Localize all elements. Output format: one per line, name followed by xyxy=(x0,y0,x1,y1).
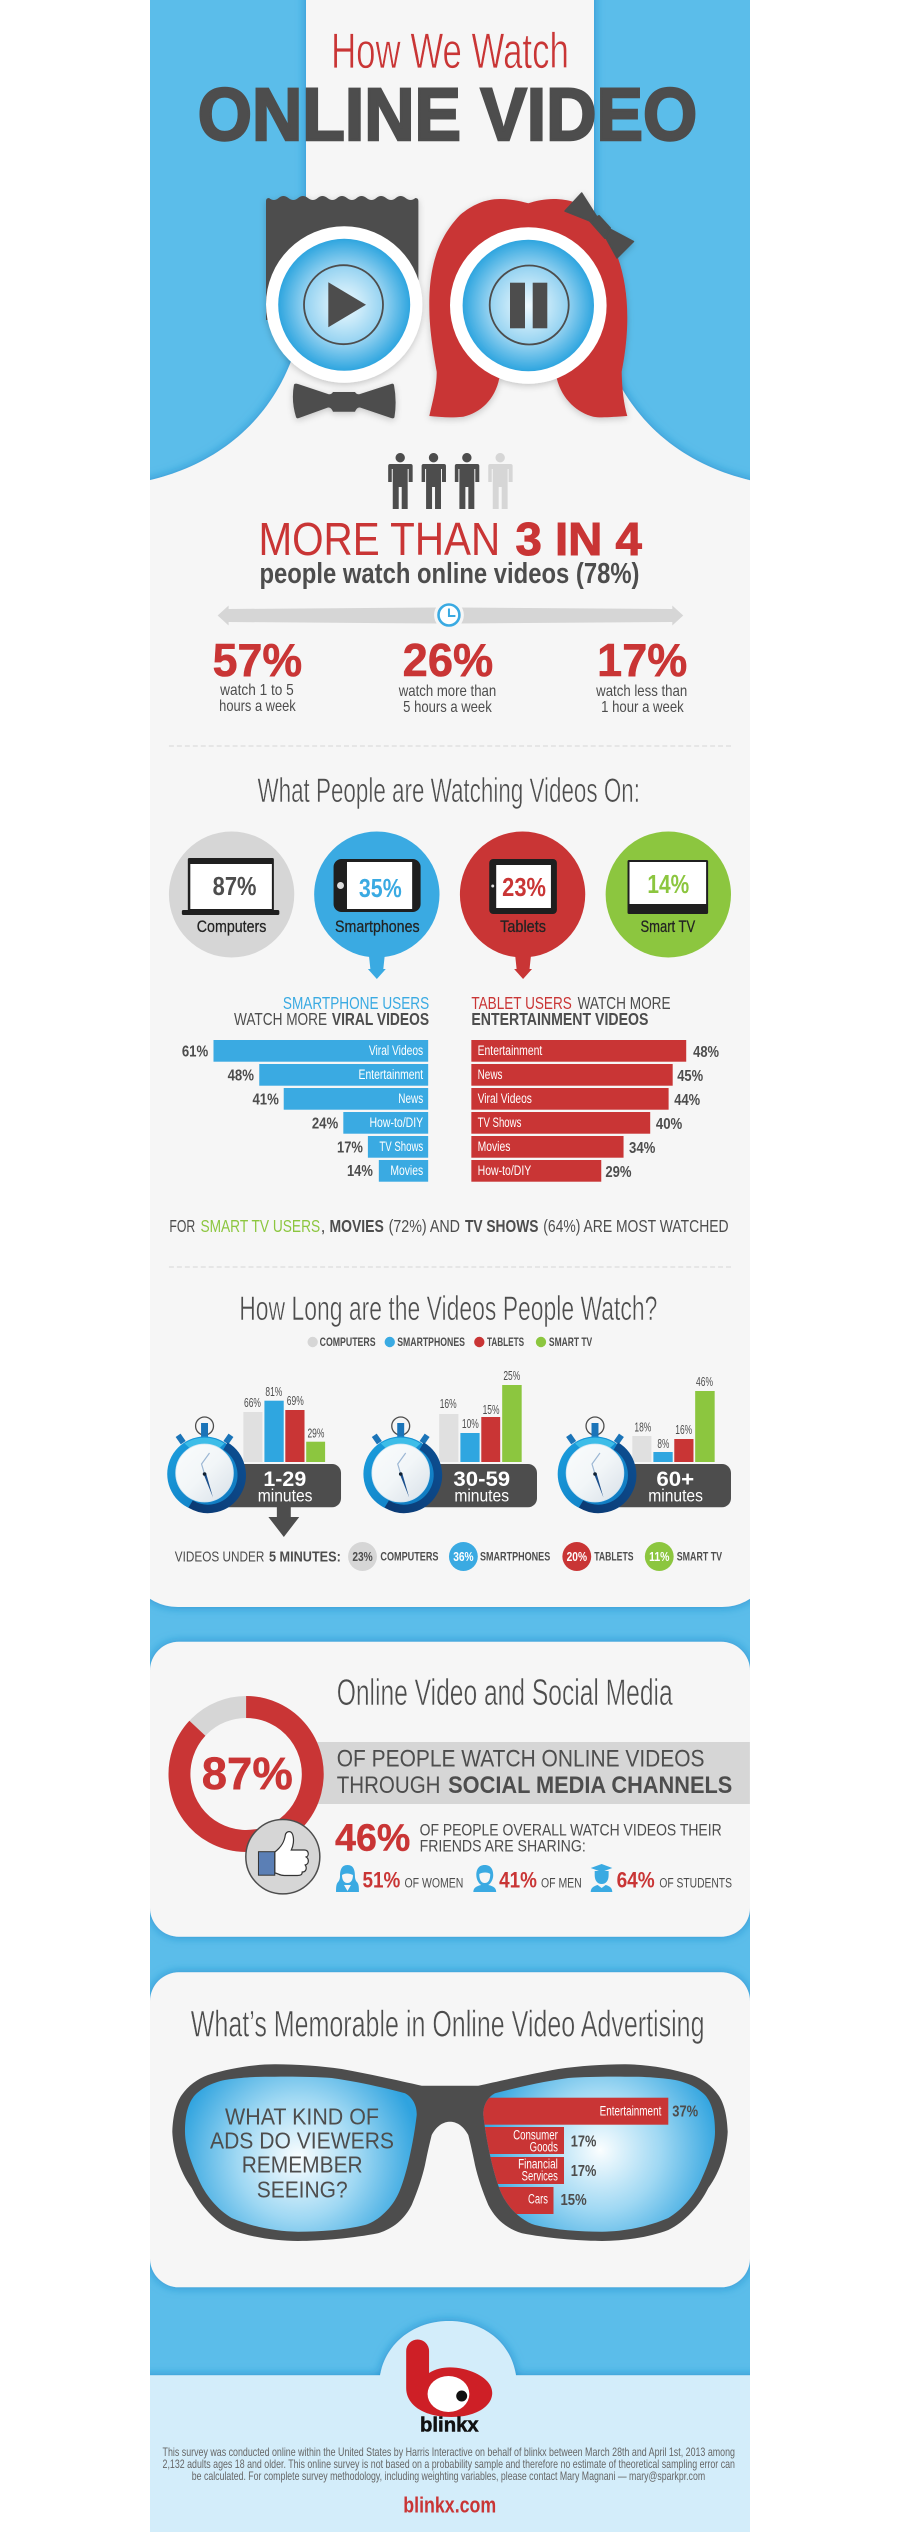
main content layer xyxy=(163,23,750,2517)
duration chart: 60+ minutes xyxy=(558,1374,731,1512)
stat: 17 percent: watch less than xyxy=(595,683,687,700)
headline: more than 3 in 4 xyxy=(258,513,642,590)
icon: thumbs up xyxy=(246,1820,320,1894)
bar chart: smartphone users: News xyxy=(398,1090,423,1106)
heading: tablet users: WATCH MORE xyxy=(578,993,671,1013)
duration chart: 60+ minutes: 18% xyxy=(634,1420,652,1435)
donut chart: 87 percent xyxy=(179,1707,313,1841)
right lens with bar chart: Goods xyxy=(530,2138,558,2154)
stat: 57 percent xyxy=(213,634,302,715)
legend: devices: TABLETS xyxy=(487,1335,524,1349)
stat: 17 percent xyxy=(595,634,687,716)
legend: devices xyxy=(307,1335,592,1349)
bar chart: tablet users: Movies xyxy=(478,1138,510,1154)
bar chart: tablet users: 45% xyxy=(677,1068,703,1085)
bar chart: smartphone users: Entertainment xyxy=(359,1066,423,1082)
heading: what people are watching: What People are Watching Videos On: xyxy=(257,772,640,810)
bar chart: tablet users: Viral Videos xyxy=(478,1090,532,1106)
stat: 57 percent: 57% xyxy=(213,634,302,686)
stat: women: OF WOMEN xyxy=(404,1875,463,1891)
heading: online video and social media: Online Video and Social Media xyxy=(337,1672,673,1713)
bar chart: smartphone users: Viral Videos xyxy=(369,1042,423,1058)
logo: blinkx xyxy=(406,2340,492,2437)
character: play button with bow tie xyxy=(266,196,422,418)
device: smart tv: 14% xyxy=(647,871,689,899)
band: social media channels: OF PEOPLE WATCH ONLINE VIDEOS xyxy=(337,1746,705,1773)
bar chart: smartphone users: 14% xyxy=(347,1163,373,1180)
stat: men: OF MEN xyxy=(541,1875,582,1891)
device: tablets: 23% xyxy=(502,874,546,902)
band: social media channels: THROUGH xyxy=(337,1772,441,1799)
title: ONLINE VIDEO xyxy=(198,73,697,156)
bar chart: tablet users: News xyxy=(478,1066,502,1082)
stat: students: 64% xyxy=(617,1868,655,1893)
bar chart: smartphone users: 61% xyxy=(182,1044,208,1061)
band: social media channels: SOCIAL MEDIA CHANNELS xyxy=(448,1772,732,1799)
bar chart: tablet users xyxy=(471,1040,719,1182)
callout: smart tv users: TV SHOWS xyxy=(465,1216,538,1236)
band: social media channels xyxy=(317,1742,750,1804)
legend: devices: SMART TV xyxy=(549,1335,592,1349)
stat: men xyxy=(473,1865,582,1893)
stat: men: 41% xyxy=(499,1868,537,1893)
row: videos under 5 minutes: SMARTPHONES xyxy=(480,1550,550,1564)
duration chart: 1-29 minutes: 1-29 xyxy=(263,1468,306,1491)
bar chart: smartphone users xyxy=(182,1040,428,1182)
arrow: time scale with clock xyxy=(218,600,683,630)
blue paper background xyxy=(150,0,750,2532)
icon: four people xyxy=(388,453,513,509)
duration chart: 30-59 minutes: 15% xyxy=(483,1402,500,1417)
right lens with bar chart: Financial xyxy=(518,2156,558,2172)
row: videos under 5 minutes xyxy=(175,1542,722,1571)
arrow: down to short videos xyxy=(268,1507,299,1537)
device: smartphones: Smartphones xyxy=(335,917,420,936)
stat: 46 percent friends: 46% xyxy=(335,1818,410,1860)
logo: blinkx: blinkx xyxy=(420,2415,479,2437)
heading: tablet users: TABLET USERS xyxy=(471,993,572,1013)
bar chart: tablet users: 44% xyxy=(674,1092,700,1109)
bar chart: tablet users: How-to/DIY xyxy=(478,1162,531,1178)
callout: smart tv users: (64%) ARE MOST WATCHED xyxy=(543,1216,729,1236)
stat: 26 percent: watch more than xyxy=(398,683,496,700)
icon: stopwatch one xyxy=(167,1417,242,1512)
duration chart: 1-29 minutes xyxy=(167,1384,341,1512)
stat: women: 51% xyxy=(363,1868,400,1893)
left lens with question: WHAT KIND OF xyxy=(225,2103,379,2129)
stat: women xyxy=(336,1865,463,1893)
duration chart: 30-59 minutes: minutes xyxy=(454,1486,509,1506)
heading: tablet users xyxy=(471,993,671,1029)
icon: stopwatch three xyxy=(558,1417,632,1512)
footer link: blinkx.com: blinkx.com xyxy=(403,2492,496,2517)
heading: how long are the videos: How Long are the Videos People Watch? xyxy=(239,1290,657,1328)
duration chart: 60+ minutes: minutes xyxy=(648,1486,703,1506)
device: smart tv xyxy=(606,832,731,958)
stat: 46 percent friends: FRIENDS ARE SHARING: xyxy=(420,1837,586,1856)
bar chart: smartphone users: 17% xyxy=(337,1140,363,1157)
right lens with bar chart: 17% xyxy=(571,2163,596,2180)
row: videos under 5 minutes: 23% xyxy=(352,1549,373,1564)
bar chart: tablet users: 40% xyxy=(656,1116,682,1133)
legend: devices: COMPUTERS xyxy=(320,1335,376,1349)
heading: tablet users: ENTERTAINMENT VIDEOS xyxy=(471,1009,648,1029)
headline: more than 3 in 4: 3 IN 4 xyxy=(516,513,642,565)
stat: 57 percent: hours a week xyxy=(219,698,296,715)
row: videos under 5 minutes: 20% xyxy=(567,1549,587,1564)
device: tablets: Tablets xyxy=(500,917,546,936)
right lens with bar chart: Cars xyxy=(528,2190,548,2206)
callout: smart tv users: SMART TV USERS xyxy=(200,1216,320,1236)
stat: 46 percent friends: OF PEOPLE OVERALL WATCH VIDEOS THEIR xyxy=(420,1820,722,1839)
right lens with bar chart: 37% xyxy=(672,2104,698,2121)
duration chart: 1-29 minutes: 66% xyxy=(244,1395,261,1410)
callout: smart tv users: FOR xyxy=(169,1216,195,1236)
right lens with bar chart: Consumer xyxy=(513,2126,558,2142)
duration chart: 60+ minutes: 8% xyxy=(657,1436,670,1451)
footnote: survey methodology: be calculated. For complete survey methodology, including weighting variables, please contact Mary Magnani — mary@sparkpr.com xyxy=(192,2471,705,2483)
right lens with bar chart: 15% xyxy=(560,2192,587,2209)
infographic canvas xyxy=(150,0,750,2532)
left lens with question: REMEMBER xyxy=(242,2152,363,2178)
duration chart: 1-29 minutes: 69% xyxy=(287,1393,304,1408)
device: computers: Computers xyxy=(197,917,266,936)
row: videos under 5 minutes: 36% xyxy=(453,1549,474,1564)
right lens with bar chart xyxy=(470,2077,715,2232)
footnote: survey methodology: This survey was conducted online within the United States by Harris Interactive on behalf of blinkx between March 28th and April 1st, 2013 among xyxy=(163,2447,735,2459)
row: videos under 5 minutes: COMPUTERS xyxy=(380,1550,439,1564)
stat: 57 percent: watch 1 to 5 xyxy=(219,682,294,699)
row: videos under 5 minutes: TABLETS xyxy=(594,1550,634,1564)
device: smartphones: 35% xyxy=(359,875,402,903)
duration chart: 30-59 minutes: 30-59 xyxy=(453,1468,510,1491)
headline: more than 3 in 4: people watch online videos (78%) xyxy=(259,558,639,590)
device: computers xyxy=(169,832,294,958)
glasses xyxy=(172,2064,728,2241)
callout: smart tv users: (72%) AND xyxy=(389,1216,460,1236)
bar chart: smartphone users: 41% xyxy=(252,1092,279,1109)
title xyxy=(198,23,697,156)
panel: social media card xyxy=(150,1642,750,1937)
row: videos under 5 minutes: SMART TV xyxy=(677,1550,722,1564)
duration chart: 60+ minutes: 60+ xyxy=(656,1468,694,1491)
device: smart tv: Smart TV xyxy=(640,917,696,936)
duration chart: 1-29 minutes: 81% xyxy=(265,1384,283,1399)
row: videos under 5 minutes: VIDEOS UNDER xyxy=(175,1549,264,1566)
icon: stopwatch two xyxy=(363,1417,438,1512)
duration chart: 30-59 minutes: 25% xyxy=(503,1368,521,1383)
right lens with bar chart: Entertainment xyxy=(600,2103,661,2119)
duration chart: 30-59 minutes: 10% xyxy=(462,1416,479,1431)
bar chart: smartphone users: TV Shows xyxy=(379,1138,423,1154)
duration chart: 1-29 minutes: 29% xyxy=(307,1426,325,1441)
panel: advertising card xyxy=(150,1972,750,2287)
stat: students xyxy=(591,1864,732,1893)
right lens with bar chart: 17% xyxy=(571,2134,596,2151)
row: videos under 5 minutes: 11% xyxy=(649,1549,670,1564)
title: How We Watch xyxy=(331,23,569,79)
callout: smart tv users: MOVIES xyxy=(329,1216,384,1236)
heading: smartphone users: VIRAL VIDEOS xyxy=(332,1009,429,1029)
bar chart: tablet users: TV Shows xyxy=(478,1114,521,1130)
bar chart: smartphone users: Movies xyxy=(390,1162,423,1178)
character: pause button with hair and bow xyxy=(429,193,634,417)
stat: students: OF STUDENTS xyxy=(659,1875,732,1891)
footnote: survey methodology: 2,132 adults ages 18 and older. This online survey is not based on a probability sample and therefore no estimate of theoretical sampling error can xyxy=(163,2459,735,2471)
bar chart: smartphone users: How-to/DIY xyxy=(369,1114,423,1130)
panel: intro and devices and duration xyxy=(130,0,770,1607)
heading: smartphone users: SMARTPHONE USERS xyxy=(283,993,429,1013)
donut chart: 87 percent: 87% xyxy=(202,1748,293,1799)
stat: 26 percent xyxy=(398,634,496,716)
heading: smartphone users: WATCH MORE xyxy=(234,1009,327,1029)
legend: devices: SMARTPHONES xyxy=(397,1335,465,1349)
bar chart: tablet users: Entertainment xyxy=(478,1042,542,1058)
stat: 17 percent: 1 hour a week xyxy=(601,699,684,716)
footnote: survey methodology xyxy=(163,2447,735,2483)
row: videos under 5 minutes: 5 MINUTES: xyxy=(269,1549,341,1566)
duration chart: 60+ minutes: 16% xyxy=(675,1422,692,1437)
bar chart: tablet users: 29% xyxy=(605,1164,632,1181)
headline: more than 3 in 4: MORE THAN xyxy=(258,513,500,565)
duration chart: 60+ minutes: 46% xyxy=(696,1374,713,1389)
left lens with question: SEEING? xyxy=(257,2176,348,2202)
stat: 26 percent: 5 hours a week xyxy=(403,699,492,716)
device: tablets xyxy=(460,832,585,979)
stat: 17 percent: 17% xyxy=(597,634,687,686)
stat: 26 percent: 26% xyxy=(403,634,493,686)
duration chart: 30-59 minutes: 16% xyxy=(440,1396,457,1411)
bar chart: smartphone users: 48% xyxy=(228,1068,254,1085)
panel: footer xyxy=(140,2321,770,2532)
callout: smart tv users xyxy=(169,1216,729,1236)
duration chart: 1-29 minutes: minutes xyxy=(258,1486,312,1506)
device: smartphones xyxy=(314,832,440,979)
left lens with question: ADS DO VIEWERS xyxy=(210,2127,394,2153)
duration chart: 30-59 minutes xyxy=(363,1368,537,1512)
left lens with question xyxy=(185,2077,417,2232)
right lens with bar chart: Services xyxy=(522,2168,558,2184)
bar chart: smartphone users: 24% xyxy=(312,1116,338,1133)
bar chart: tablet users: 48% xyxy=(693,1044,719,1061)
callout: smart tv users: , xyxy=(321,1216,325,1236)
stat: 46 percent friends xyxy=(335,1818,722,1860)
device: computers: 87% xyxy=(213,873,256,901)
heading: smartphone users xyxy=(234,993,429,1029)
bar chart: tablet users: 34% xyxy=(629,1140,655,1157)
